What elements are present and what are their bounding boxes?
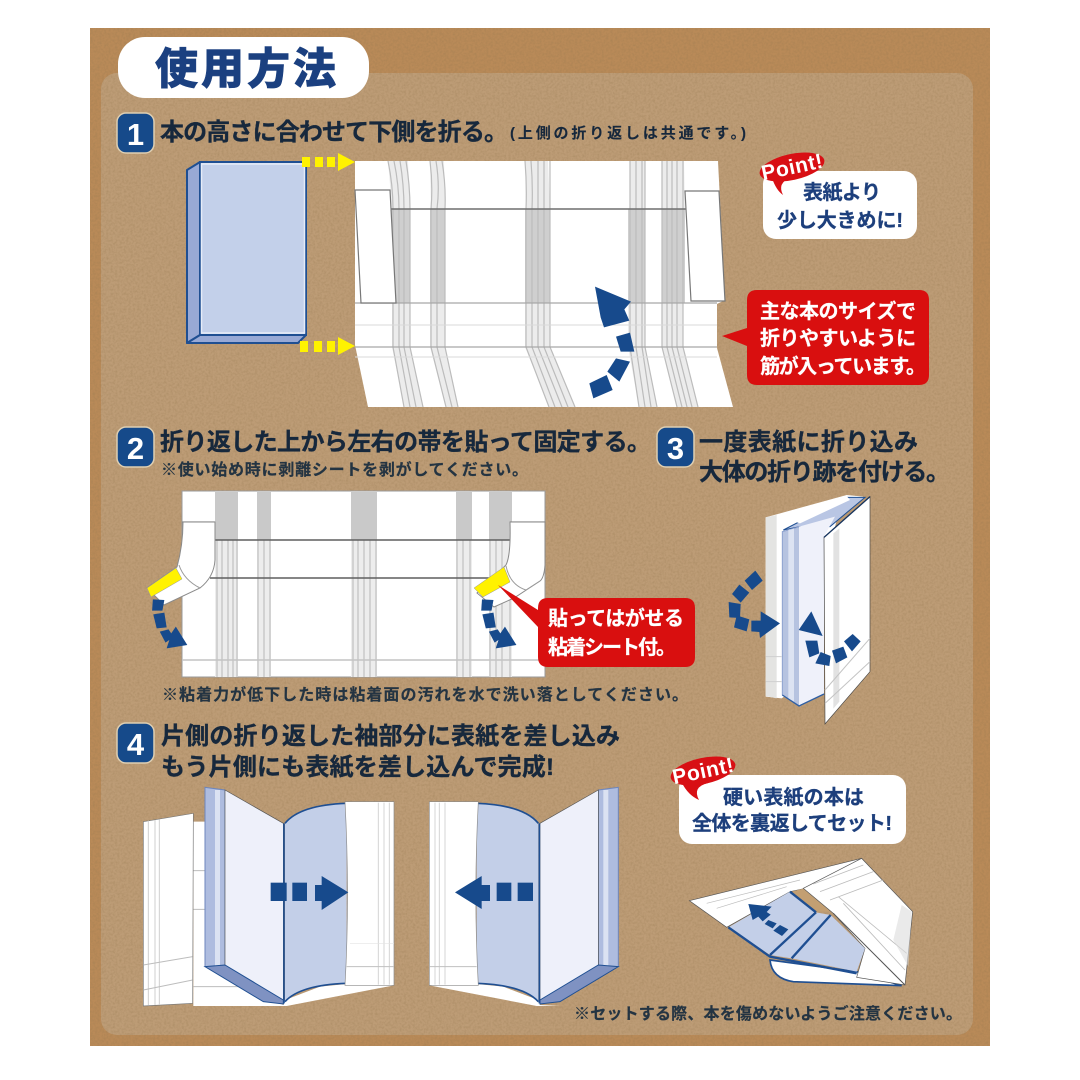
step 2 heading xyxy=(117,427,651,479)
step 3 fold arrows xyxy=(729,571,861,666)
yellow dashed guide arrows xyxy=(300,153,355,355)
left folded band xyxy=(355,190,396,303)
left band with peel sheet xyxy=(147,522,215,605)
step 4 left arrow xyxy=(271,876,348,910)
step 2 left arrow xyxy=(152,599,187,648)
red callout: pre-scored creases: 主な本のサイズで xyxy=(760,299,916,323)
step 1 curved fold arrow xyxy=(589,287,634,398)
red callout: pre-scored creases: 筋が入っています。 xyxy=(760,354,926,378)
step 4 heading xyxy=(117,723,620,781)
step 1 heading: 本の高さに合わせて下側を折る。 xyxy=(160,119,508,146)
red callout: pre-scored creases xyxy=(722,290,929,385)
step 3 book in paper xyxy=(766,495,870,724)
point callout: slightly larger: Point! xyxy=(759,150,825,185)
crease stripes xyxy=(182,492,545,677)
crease stripes xyxy=(355,161,717,407)
red callout: removable adhesive sheet: 貼ってはがせる xyxy=(548,606,684,630)
step 3 heading: 一度表紙に折り込み xyxy=(699,429,918,456)
point callout: slightly larger xyxy=(757,147,917,239)
blue covers xyxy=(728,892,816,955)
step 3 heading: 大体の折り跡を付ける。 xyxy=(699,459,950,486)
point callout: slightly larger: 少し大きめに! xyxy=(777,209,903,232)
point callout: hardcover books: Point! xyxy=(670,754,736,789)
step 3 heading: 3 xyxy=(667,431,684,466)
step 1 heading: 1 xyxy=(127,117,144,152)
step 1 heading xyxy=(117,113,746,153)
red callout: removable adhesive sheet: 粘着シート付。 xyxy=(548,636,676,659)
step 4 heading: もう片側にも表紙を差し込んで完成! xyxy=(161,754,554,781)
step 1 heading: (上側の折り返しは共通です。) xyxy=(510,124,746,142)
title pill xyxy=(118,37,369,98)
step 2 heading: 折り返した上から左右の帯を貼って固定する。 xyxy=(160,429,651,456)
kraft paper background xyxy=(90,28,990,1046)
point callout: hardcover books: 硬い表紙の本は xyxy=(723,786,864,809)
book pages xyxy=(770,960,902,986)
final footnote: ※セットする際、本を傷めないようご注意ください。 xyxy=(574,1004,962,1023)
step 1 book icon xyxy=(187,162,306,343)
point callout: hardcover books xyxy=(668,751,906,844)
step 3 heading xyxy=(657,427,950,486)
step 4 right arrow xyxy=(455,876,533,909)
step 4 heading: 片側の折り返した袖部分に表紙を差し込み xyxy=(161,723,620,750)
step 2 right arrow xyxy=(481,599,516,648)
step 4 heading: 4 xyxy=(127,727,145,762)
hardcover fold illustration xyxy=(689,858,913,986)
right band with peel sheet xyxy=(474,522,545,607)
red callout: removable adhesive sheet xyxy=(498,585,695,667)
step 2 heading: 2 xyxy=(127,431,144,466)
step 1 paper cover sheet xyxy=(355,161,733,407)
title pill: 使用方法 xyxy=(155,46,336,94)
right folded band xyxy=(685,191,725,301)
step 2 footnote: ※粘着力が低下した時は粘着面の汚れを水で洗い落としてください。 xyxy=(162,685,688,704)
step 2 heading: ※使い始め時に剥離シートを剥がしてください。 xyxy=(161,460,528,479)
red callout: pre-scored creases: 折りやすいように xyxy=(760,327,916,350)
point callout: hardcover books: 全体を裏返してセット! xyxy=(692,812,892,835)
step 2 paper sheet xyxy=(147,491,545,677)
step 4 right book xyxy=(429,787,618,1006)
hardcover small arrow xyxy=(748,904,788,936)
point callout: slightly larger: 表紙より xyxy=(803,181,881,204)
step 4 left book xyxy=(143,787,394,1006)
